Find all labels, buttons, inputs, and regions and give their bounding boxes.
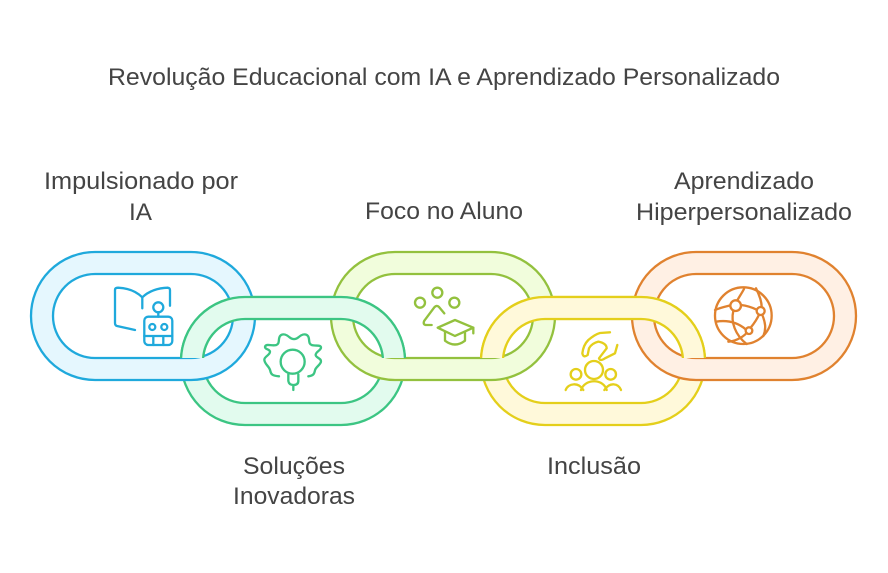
title: Revolução Educacional com IA e Aprendizado Personalizado — [108, 64, 780, 91]
icon: people with hand — [566, 332, 621, 390]
label: Soluções Inovadoras: Soluções — [243, 453, 345, 480]
label: Inclusão: Inclusão — [547, 453, 641, 480]
label: Foco no Aluno: Foco no Aluno — [365, 198, 523, 225]
label: Impulsionado por IA: Impulsionado por — [44, 168, 238, 195]
label: Soluções Inovadoras: Inovadoras — [233, 483, 355, 510]
chain link: yellow, lower layer — [481, 297, 705, 425]
chain link: green, lower layer — [181, 297, 405, 425]
icon: graduation cap with shapes — [415, 288, 473, 344]
label: Impulsionado por IA: IA — [129, 199, 152, 226]
green link upper crossing — [180, 296, 406, 358]
chain link: blue — [31, 252, 255, 380]
icon: open book with robot — [115, 288, 172, 345]
chain link: olive — [331, 252, 555, 380]
label: Impulsionado por IA — [44, 168, 238, 226]
label: Aprendizado Hiperpersonalizado: Aprendizado — [674, 168, 814, 195]
chain link: orange — [632, 252, 856, 380]
icon: network globe — [715, 287, 772, 344]
label: Aprendizado Hiperpersonalizado — [636, 168, 852, 226]
icon: gear with light bulb — [264, 334, 321, 390]
yellow link upper crossing — [480, 296, 706, 358]
label: Aprendizado Hiperpersonalizado: Hiperpersonalizado — [636, 199, 852, 226]
label: Soluções Inovadoras — [233, 453, 355, 510]
